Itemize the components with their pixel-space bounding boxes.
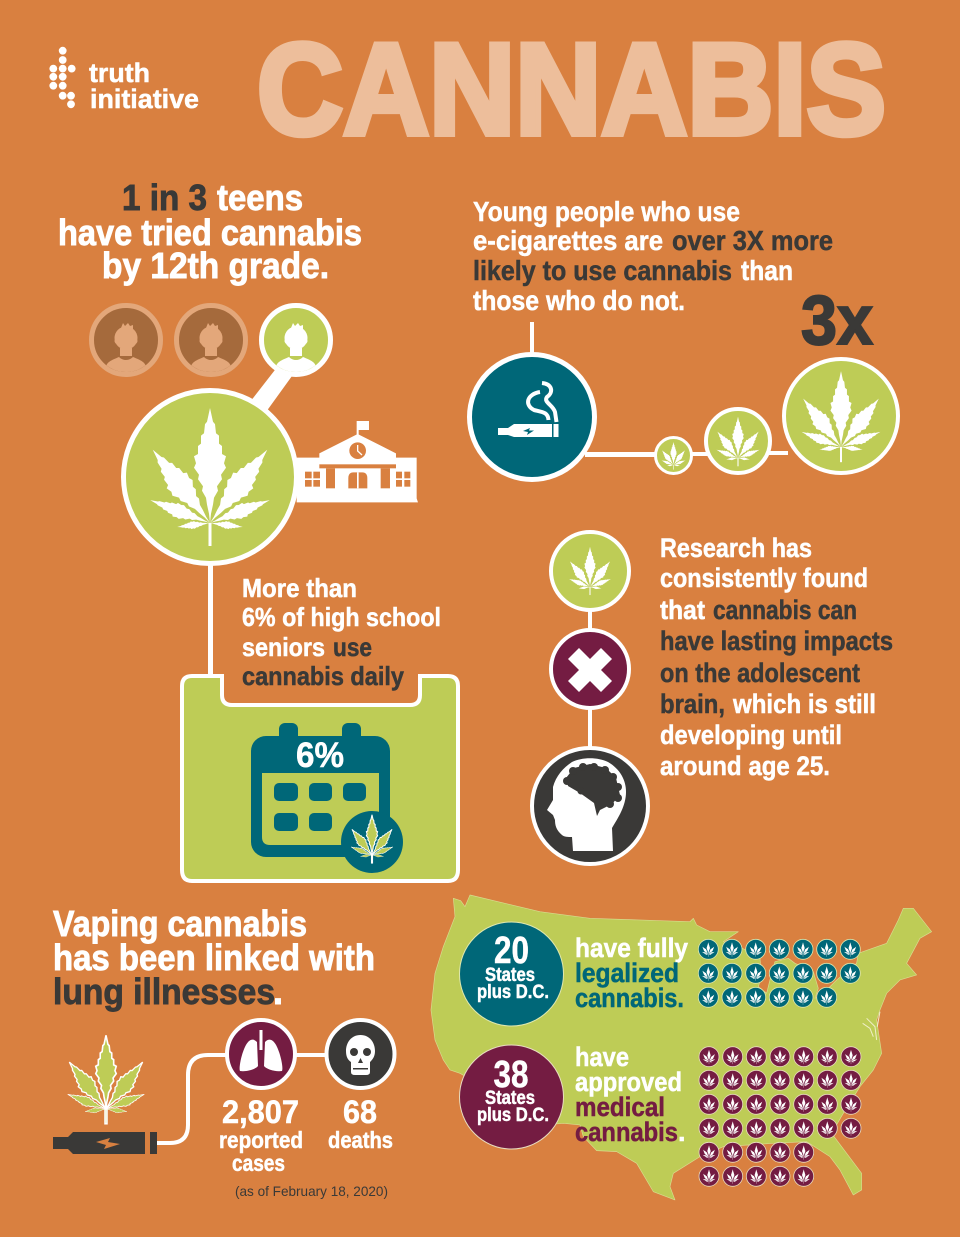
text: research on adolescent brain: brain, — [660, 689, 725, 719]
text: research on adolescent brain: on the adolescent — [660, 658, 860, 688]
stat circle: 38 states: States — [485, 1088, 535, 1109]
stat circle: 38 states — [460, 1045, 564, 1149]
heading: 1 in 3 teens: have tried cannabis — [58, 212, 362, 253]
stat: deaths — [328, 1094, 393, 1153]
icon: lungs — [227, 1020, 295, 1088]
stat circle: 38 states: 38 — [494, 1054, 528, 1096]
icon: vape pen — [53, 1132, 157, 1154]
heading: 1 in 3 teens: 1 in 3 — [122, 177, 207, 218]
stat: deaths: deaths — [328, 1127, 393, 1153]
pictogram: 38 states plus DC — [699, 1047, 861, 1186]
text: research on adolescent brain: Research has — [660, 533, 812, 563]
logo: truth initiative — [49, 47, 199, 114]
heading: vaping cannabis: has been linked with — [53, 937, 375, 978]
stat circle: 38 states: plus D.C. — [477, 1105, 549, 1126]
icon: outlined leaf — [63, 1035, 149, 1124]
panel: calendar card — [182, 676, 458, 881]
text: research on adolescent brain: which is still — [732, 689, 876, 719]
label: 3x: 3x — [801, 281, 873, 359]
connectors: e-cigarette to leaves — [530, 322, 788, 457]
text: approved medical: cannabis — [575, 1117, 678, 1147]
logo: truth initiative: initiative — [90, 84, 199, 114]
text: 6% of high school seniors: use — [333, 632, 372, 662]
note: date: (as of February 18, 2020) — [235, 1183, 388, 1199]
text: fully legalized: legalized — [575, 958, 679, 988]
icon: calendar: 6% — [296, 736, 344, 775]
text: young people who use e-cigarettes: e-cigarettes are — [473, 225, 663, 256]
icon: brain in head — [532, 748, 648, 864]
text: approved medical: . — [678, 1117, 686, 1147]
icon: large cannabis leaf circle — [124, 390, 296, 564]
title: CANNABIS — [257, 16, 886, 162]
text: 6% of high school seniors: 6% of high school — [242, 602, 441, 632]
text: research on adolescent brain: developing until — [660, 720, 842, 750]
detail: chesapeake bay — [863, 1012, 880, 1040]
heading: vaping cannabis: . — [273, 971, 283, 1012]
pictogram: 20 states plus DC — [698, 939, 860, 1007]
text: 6% of high school seniors: seniors — [242, 632, 325, 662]
stat: reported cases: 2,807 — [222, 1094, 299, 1130]
text: 6% of high school seniors: cannabis daily — [242, 661, 404, 691]
text: fully legalized: cannabis. — [575, 983, 684, 1013]
text: approved medical: approved — [575, 1067, 682, 1097]
text: research on adolescent brain: cannabis can — [713, 595, 857, 625]
connector: leaf to calendar card — [208, 560, 213, 678]
heading: vaping cannabis — [53, 903, 375, 1012]
text: fully legalized: have fully — [575, 933, 688, 963]
text: research on adolescent brain — [660, 533, 893, 781]
text: young people who use e-cigarettes: over 3X more — [672, 225, 833, 256]
icons: three teens — [92, 306, 330, 374]
text: young people who use e-cigarettes: those who do not. — [473, 285, 685, 316]
stat: reported cases: cases — [232, 1150, 285, 1176]
teen icon 1 — [92, 306, 160, 374]
heading: 1 in 3 teens: by 12th grade. — [102, 245, 329, 286]
stat: reported cases — [219, 1094, 303, 1176]
text: young people who use e-cigarettes — [473, 196, 833, 316]
stat circle: 20 states — [460, 922, 564, 1026]
stat: deaths: 68 — [343, 1094, 377, 1130]
stat circle: 20 states: 20 — [494, 930, 529, 972]
icon: x circle — [551, 630, 629, 708]
logo: truth initiative: truth — [89, 58, 150, 88]
icon: medium leaf circle — [706, 409, 770, 473]
text: research on adolescent brain: around age 25. — [660, 751, 830, 781]
icon: leaf circle — [551, 532, 629, 610]
icon: large leaf circle — [784, 359, 898, 473]
teen icon 3 highlighted — [262, 306, 330, 374]
text: young people who use e-cigarettes: likely to use cannabis — [473, 255, 732, 286]
text: research on adolescent brain: consistently found — [660, 563, 868, 593]
heading: vaping cannabis: lung illnesses — [53, 971, 275, 1012]
text: research on adolescent brain: have lasting impacts — [660, 626, 893, 656]
text: young people who use e-cigarettes: Young people who use — [473, 196, 740, 227]
connector: teen to leaf — [250, 366, 292, 412]
text: approved medical: have — [575, 1042, 629, 1072]
icon: skull — [326, 1020, 394, 1088]
connector: vape to lungs and skull — [157, 1055, 330, 1143]
heading: vaping cannabis: Vaping cannabis — [53, 903, 307, 944]
stat circle: 20 states: plus D.C. — [477, 982, 549, 1003]
map: united states — [431, 895, 932, 1200]
stat circle: 20 states: States — [485, 965, 535, 986]
icon: school — [297, 421, 418, 502]
icon: small leaf circle — [656, 438, 692, 474]
text: approved medical — [575, 1042, 686, 1147]
text: young people who use e-cigarettes: than — [741, 255, 793, 286]
text: approved medical: medical — [575, 1092, 665, 1122]
connectors: research chain — [588, 608, 592, 748]
teen icon 2 — [176, 306, 246, 374]
text: 6% of high school seniors — [242, 573, 441, 691]
text: 6% of high school seniors: More than — [242, 573, 357, 603]
text: research on adolescent brain: that — [660, 595, 705, 625]
text: fully legalized — [575, 933, 688, 1013]
stat: reported cases: reported — [219, 1127, 303, 1153]
heading: 1 in 3 teens — [58, 177, 362, 286]
heading: 1 in 3 teens: teens — [217, 177, 303, 218]
icon: e-cigarette circle — [470, 354, 594, 480]
icon: calendar — [251, 723, 403, 873]
